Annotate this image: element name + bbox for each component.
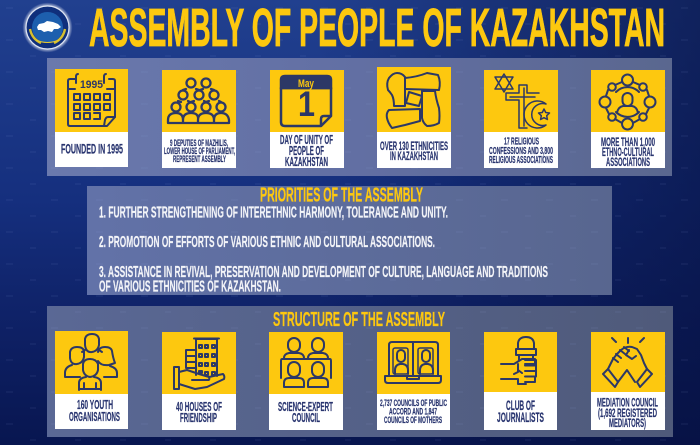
icon: hand holding microphone [501,337,536,384]
label [280,133,333,169]
logo [22,2,72,52]
icon: clasped hands [603,338,652,387]
label: 9 DEPUTIES OF MAZHILIS, [170,138,228,148]
label: CONFESSIONS AND 3,800 [489,146,553,157]
card: youth organisations: ORGANISATIONS [69,410,120,424]
label: FOUNDED IN 1995 [61,140,123,156]
priorities list: OF VARIOUS ETHNICITIES OF KAZAKHSTAN. [99,278,281,296]
label [69,398,120,424]
label [597,396,658,430]
panel: key facts [47,58,672,176]
panel: priorities [87,184,612,296]
label: FRIENDSHIP [180,411,217,425]
label: COUNCIL [292,411,320,425]
card: ethnicities [377,67,451,168]
label [380,398,447,426]
icon: council members at a table [281,338,331,387]
label: PEOPLE OF [289,144,324,158]
label: MEDIATORS) [609,416,646,430]
heading: priorities: PRIORITIES OF THE ASSEMBLY [260,184,423,206]
label: ACCORD AND 1,847 [389,406,437,418]
label: IN KAZAKHSTAN [390,149,438,163]
priorities list [99,204,548,296]
label: SCIENCE-EXPERT [278,400,333,414]
label [176,400,222,425]
icon: interlocked hands [387,73,440,128]
card: ethno-cultural associations [591,70,665,169]
card: science-expert council [269,332,343,430]
card: youth organisations [55,331,128,429]
label: KAZAKHSTAN [285,155,328,169]
label: CLUB OF [506,397,535,413]
panel: structure [47,306,673,437]
card: founded in 1995 [55,69,128,167]
card: religious confessions [484,70,558,168]
card: houses of friendship [162,332,236,430]
icon: May 1 calendar [281,76,331,126]
label: 2,737 COUNCILS OF PUBLIC [380,398,447,409]
card: mediation council [591,332,665,430]
icon: group of youth [65,334,117,390]
label [489,136,553,166]
label: OVER 130 ETHNICITIES [380,139,448,153]
label: ASSOCIATIONS [606,155,650,169]
card: day of unity [270,70,344,169]
label [497,397,544,425]
label [164,138,235,164]
label: REPRESENT ASSEMBLY [173,154,226,164]
label [278,400,333,425]
label: 17 RELIGIOUS [504,136,539,148]
card: religious confessions: RELIGIOUS ASSOCIATIONS [489,155,553,166]
label: 160 YOUTH [77,398,113,412]
label [380,139,448,163]
icon: May 1 calendar: 1 [298,85,315,124]
card: deputies of mazhilis [162,70,236,168]
icon: calendar 1995: 1995 [80,79,103,91]
card: day of unity: DAY OF UNITY OF [280,133,333,147]
panel: key facts: LOWER HOUSE OF PARLIAMENT, [164,146,235,156]
icon: buildings on a hand [174,338,224,389]
icon: ethno-cultural network [600,74,656,130]
icon: religious symbols [495,74,550,128]
icon: crowd of deputies [168,78,229,123]
label: 40 HOUSES OF [176,400,222,414]
icon: laptop with two women [385,342,441,383]
card: councils of public accord [377,332,450,430]
card: club of journalists [484,332,557,430]
heading: structure: STRUCTURE OF THE ASSEMBLY [273,308,445,331]
label [601,135,655,169]
icon: May 1 calendar: May [298,78,315,90]
card: club of journalists: JOURNALISTS [497,409,544,425]
label: COUNCILS OF MOTHERS [384,415,442,426]
